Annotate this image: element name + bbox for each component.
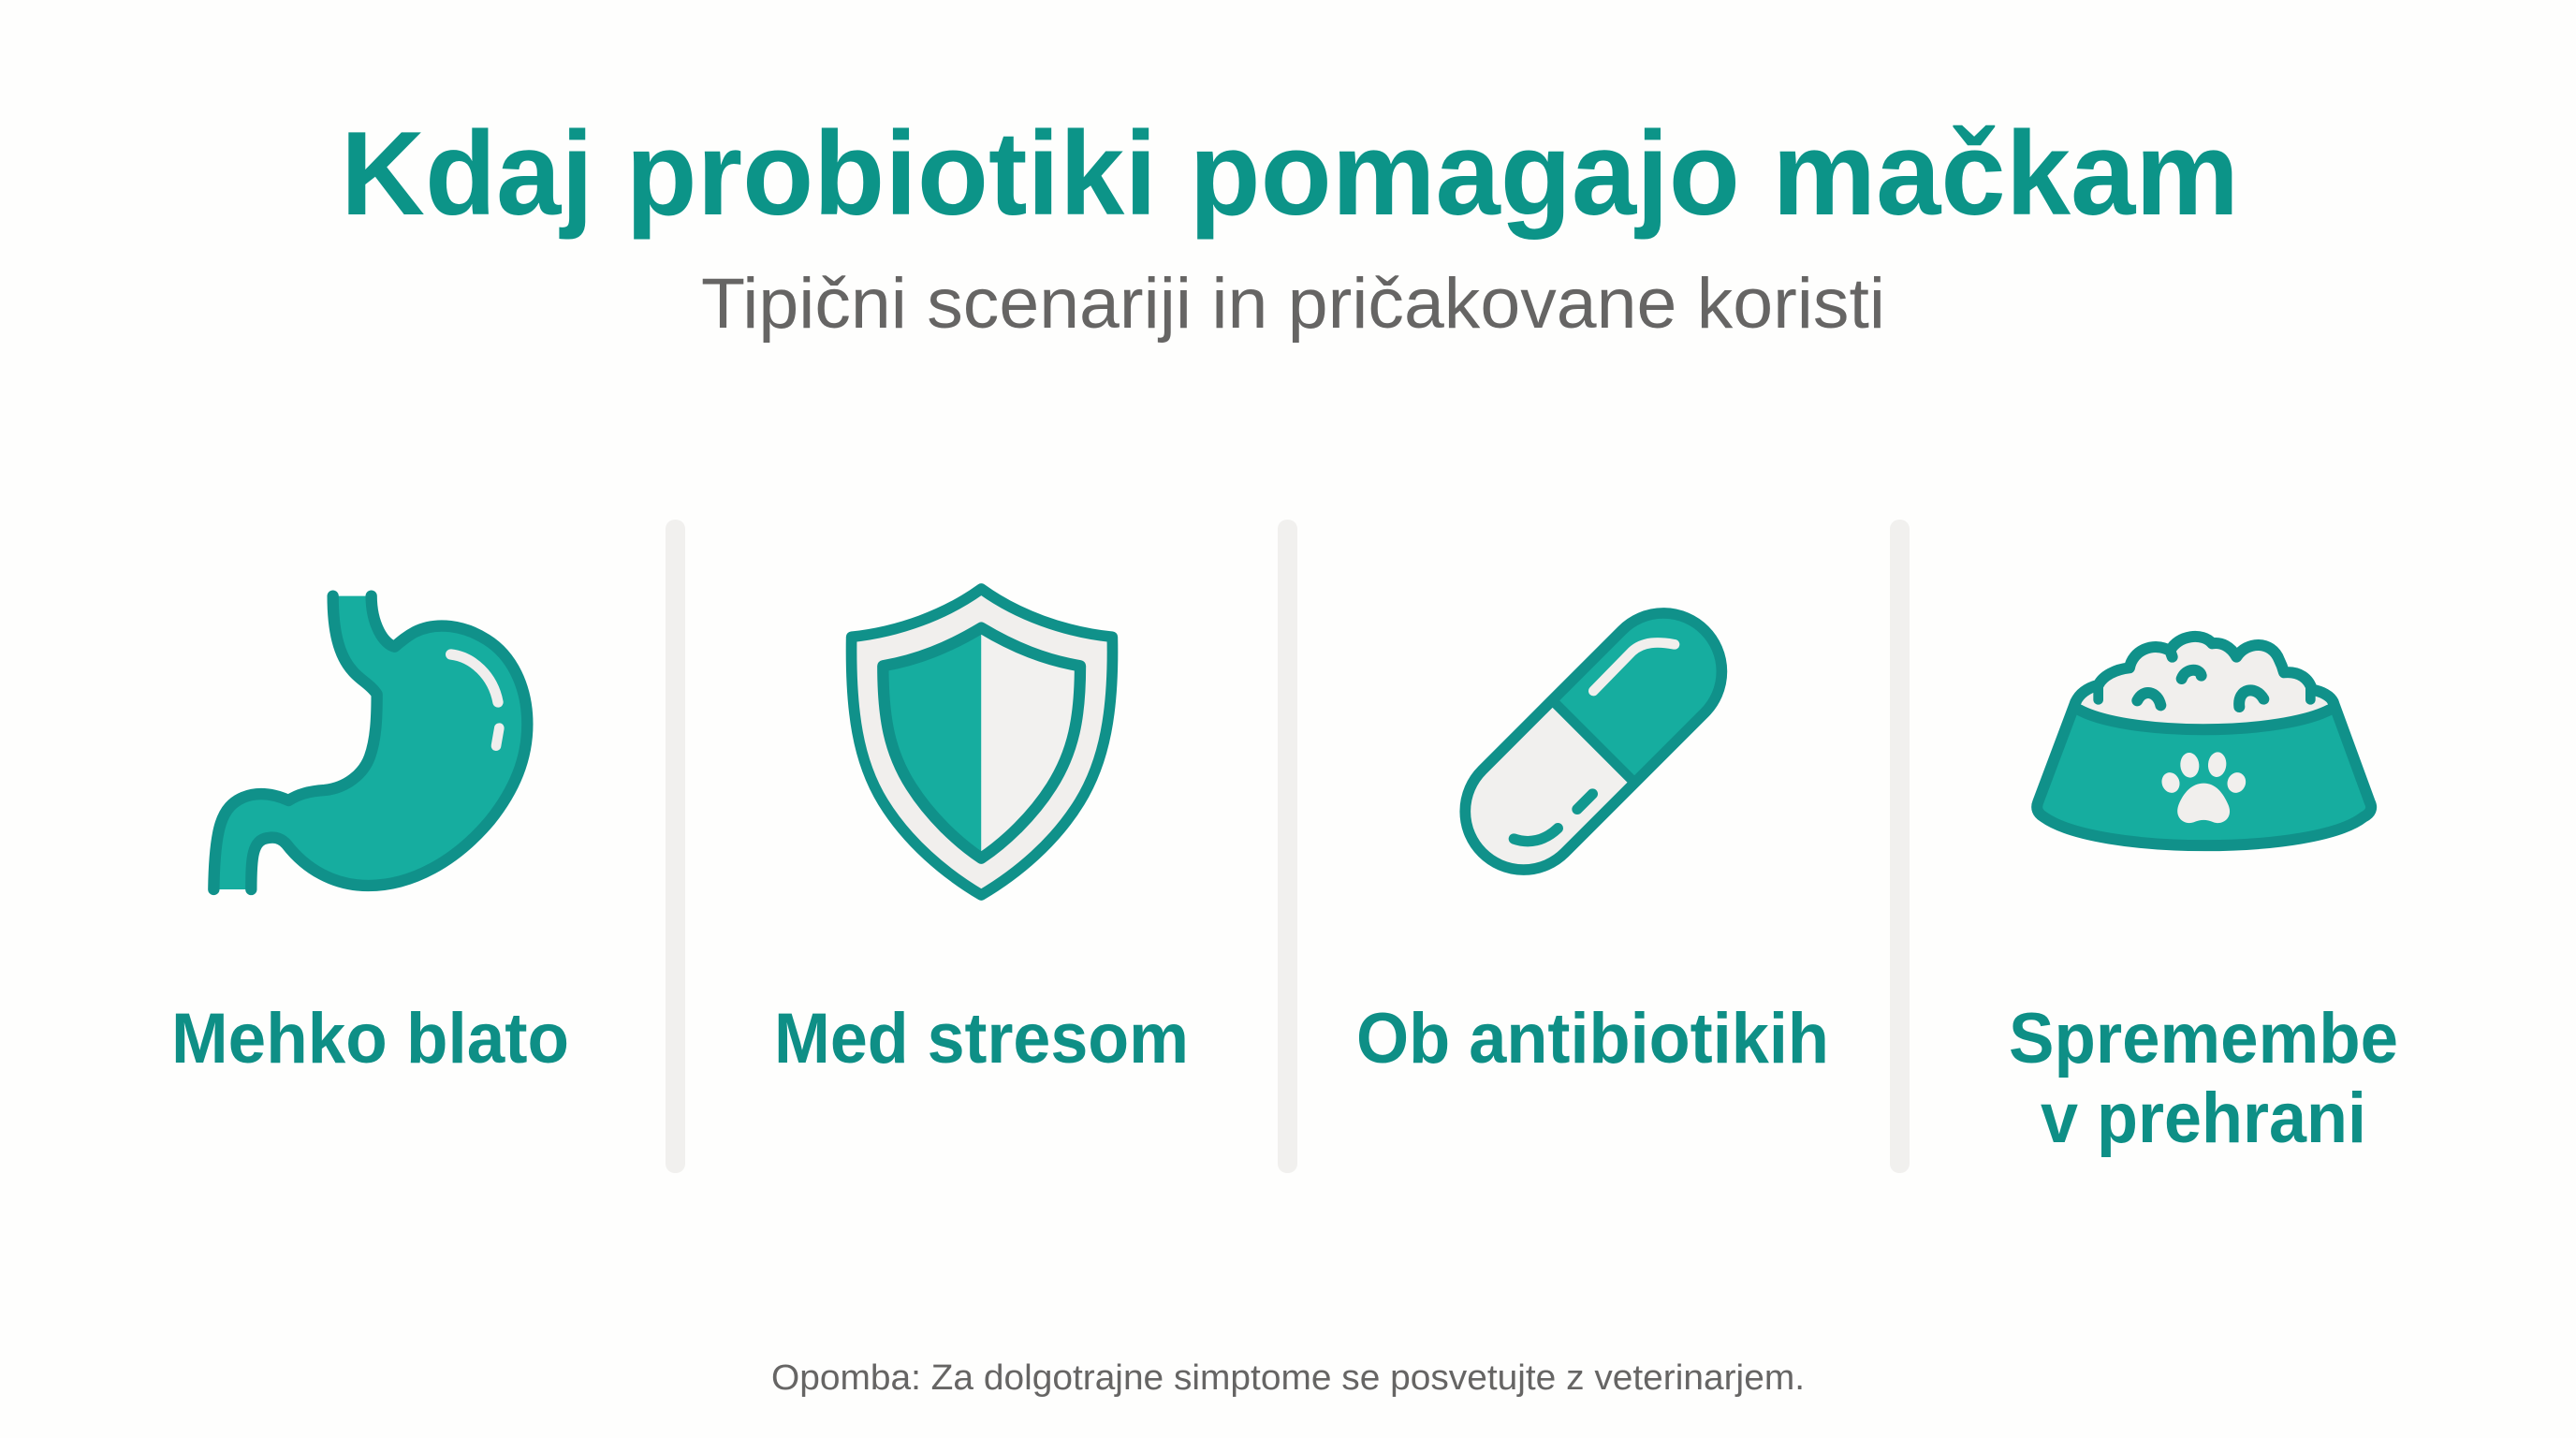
icon: shield [852, 589, 1113, 895]
icon: food bowl [2037, 637, 2371, 845]
label: Mehko blato: Mehko blato [171, 999, 569, 1078]
panel: diet changes [2009, 637, 2398, 1158]
label: Spremembe v prehrani: Spremembe [2009, 999, 2398, 1078]
subtitle: Tipični scenariji in pričakovane koristi [701, 264, 1885, 344]
icon: stomach [213, 596, 527, 889]
label: Spremembe v prehrani: v prehrani [2041, 1078, 2366, 1158]
title: Kdaj probiotiki pomagajo mačkam [341, 107, 2239, 240]
label: Med stresom: Med stresom [774, 999, 1189, 1078]
panel: antibiotics [1356, 589, 1829, 1078]
label: Ob antibiotikih: Ob antibiotikih [1356, 999, 1829, 1078]
label: Spremembe v prehrani [2009, 999, 2398, 1158]
footnote: Opomba: Za dolgotrajne simptome se posvetujte z veterinarjem. [771, 1358, 1805, 1398]
panel: soft stool [171, 596, 569, 1078]
panel: stress [774, 589, 1189, 1078]
icon: capsule [1441, 589, 1746, 894]
